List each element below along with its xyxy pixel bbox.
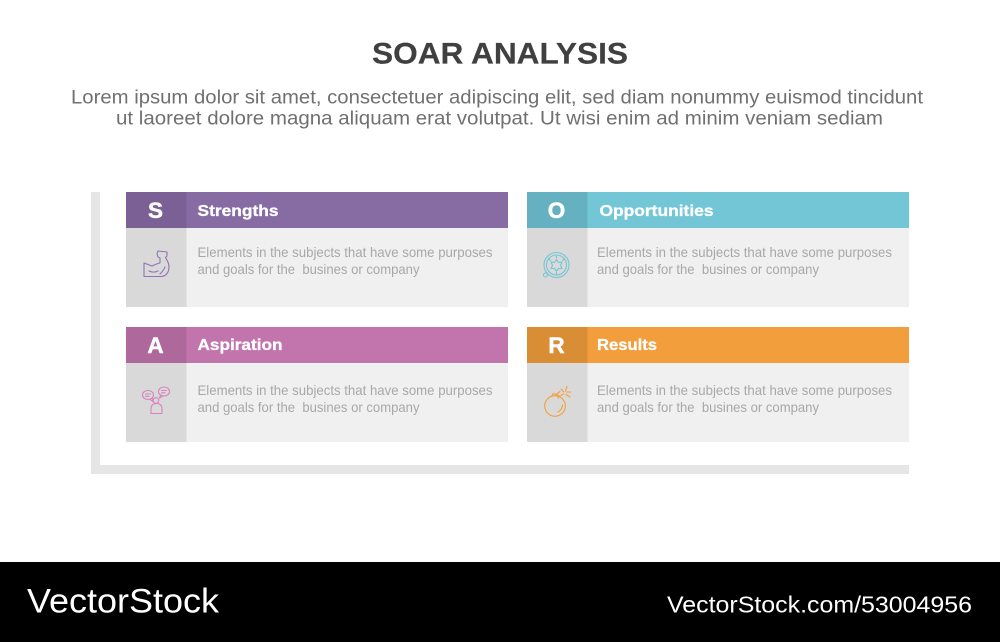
- title: SOAR ANALYSIS: [372, 38, 628, 70]
- footer url: VectorStock.com/53004956: [667, 592, 972, 618]
- description: results: and goals for the busines or company: [597, 399, 819, 415]
- heading: aspiration: Aspiration: [198, 337, 282, 354]
- icon: gear in circle: [544, 252, 569, 278]
- description: aspiration: [198, 382, 492, 415]
- subtitle text block: [71, 86, 924, 130]
- description: aspiration: Elements in the subjects that have some purposes: [198, 382, 492, 398]
- L-shaped frame: [91, 192, 909, 474]
- description: results: [597, 382, 892, 415]
- icon: flexed arm: [144, 251, 169, 276]
- subtitle text block: ut laoreet dolore magna aliquam erat volutpat. Ut wisi enim ad minim veniam sediam: [116, 108, 883, 130]
- subtitle text block: Lorem ipsum dolor sit amet, consectetuer adipiscing elit, sed diam nonummy euismod tincidunt: [71, 86, 924, 108]
- description: aspiration: and goals for the busines or company: [198, 399, 420, 415]
- letter O: O: [548, 198, 565, 223]
- description: strengths: and goals for the busines or company: [198, 261, 420, 277]
- letter A: A: [147, 333, 164, 358]
- description: opportunities: and goals for the busines or company: [597, 261, 819, 277]
- heading: results: Results: [597, 337, 657, 354]
- description: results: Elements in the subjects that have some purposes: [597, 382, 892, 398]
- panel: aspiration: [126, 327, 508, 442]
- letter S: S: [148, 198, 163, 223]
- description: opportunities: [597, 244, 892, 277]
- panel: strengths: [126, 192, 508, 307]
- heading: strengths: Strengths: [198, 203, 279, 220]
- panel: opportunities: [527, 192, 909, 307]
- heading: opportunities: Opportunities: [600, 203, 714, 220]
- panel: results: [527, 327, 909, 442]
- footer logo: VectorStock: [27, 583, 220, 621]
- letter R: R: [548, 333, 565, 358]
- description: strengths: Elements in the subjects that have some purposes: [198, 244, 492, 260]
- icon: person with speech bubbles: [142, 387, 170, 414]
- footer bar: [0, 562, 1000, 642]
- description: opportunities: Elements in the subjects that have some purposes: [597, 244, 892, 260]
- description: strengths: [198, 244, 492, 277]
- icon: bomb: [545, 386, 571, 416]
